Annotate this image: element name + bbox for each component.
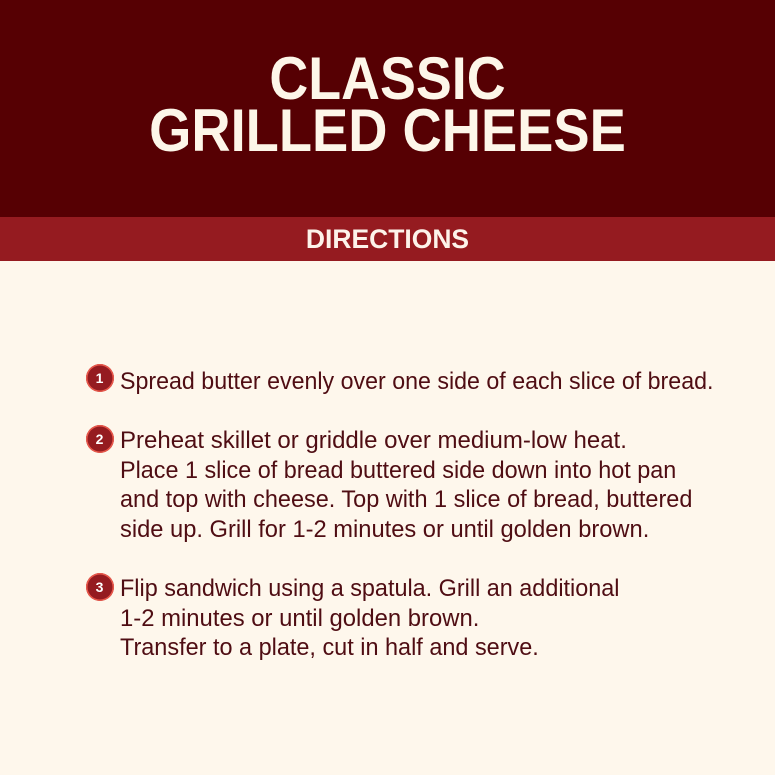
step 3 text: Transfer to a plate, cut in half and serve.	[120, 634, 539, 661]
step 1 badge: 1	[96, 370, 103, 386]
step 3 text: Flip sandwich using a spatula. Grill an additional	[120, 575, 619, 602]
step 2 text	[120, 427, 692, 542]
step 2 text: Preheat skillet or griddle over medium-low heat.	[120, 427, 627, 454]
step 2 badge: 2	[96, 431, 103, 447]
step 1	[86, 364, 713, 394]
step 2 badge	[86, 425, 114, 453]
header band	[0, 0, 775, 217]
step 1 badge	[86, 364, 114, 392]
step 2 text: and top with cheese. Top with 1 slice of bread, buttered	[120, 486, 692, 513]
step 3 text: 1-2 minutes or until golden brown.	[120, 604, 479, 632]
title line 1: CLASSIC	[269, 45, 506, 112]
step 3 badge: 3	[96, 579, 103, 595]
step 3 badge	[86, 573, 114, 601]
step 1 text: Spread butter evenly over one side of each slice of bread.	[120, 368, 713, 394]
step 2	[86, 425, 692, 542]
step 2 text: side up. Grill for 1-2 minutes or until golden brown.	[120, 516, 649, 542]
title line 2: GRILLED CHEESE	[149, 97, 626, 164]
directions band	[0, 217, 775, 261]
directions heading: DIRECTIONS	[306, 224, 469, 254]
step 3	[86, 573, 619, 661]
step 2 text: Place 1 slice of bread buttered side down into hot pan	[120, 457, 676, 484]
step 3 text	[120, 575, 619, 661]
